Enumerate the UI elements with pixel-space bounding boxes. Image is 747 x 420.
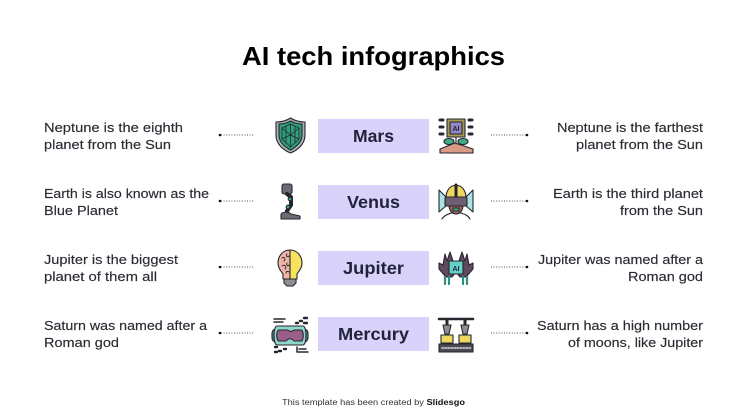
icon: VR headset person xyxy=(439,185,473,219)
right text: Saturn: Saturn has a high number xyxy=(537,318,704,333)
row 4: Mercury xyxy=(44,317,704,352)
right connector xyxy=(491,266,528,268)
icon: hands holding AI chip xyxy=(439,252,473,284)
row 3: Jupiter xyxy=(44,250,704,286)
right text: Earth: from the Sun xyxy=(620,203,703,218)
left text: Earth: Earth is also known as the xyxy=(44,186,209,201)
left text: Jupiter xyxy=(44,252,178,284)
right text: Earth xyxy=(553,186,703,218)
icon: VR goggles xyxy=(272,318,308,352)
icon: AI chip plant: AI xyxy=(452,126,460,133)
icon: robot arm xyxy=(281,184,300,219)
right text: Saturn: of moons, like Jupiter xyxy=(568,335,704,350)
label box: Mercury xyxy=(318,317,429,351)
left text: Saturn xyxy=(44,318,208,350)
label box: Venus: Venus xyxy=(347,192,400,212)
left connector xyxy=(219,332,254,334)
right text: Neptune: Neptune is the farthest xyxy=(557,120,703,135)
icon: AI chip plant xyxy=(440,119,473,153)
icon: factory conveyor robots xyxy=(439,319,473,352)
left text: Neptune: planet from the Sun xyxy=(44,137,171,152)
left text: Saturn: Roman god xyxy=(44,335,119,350)
right connector xyxy=(491,332,528,334)
left text: Earth xyxy=(44,186,209,218)
right text: Neptune xyxy=(557,120,703,152)
footer credit: This template has been created by Slidesgo xyxy=(282,398,465,407)
left text: Jupiter: Jupiter is the biggest xyxy=(44,252,178,267)
right text: Jupiter xyxy=(538,252,704,284)
row 2: Venus xyxy=(44,184,703,219)
left connector xyxy=(219,266,254,268)
icon: brain light bulb xyxy=(278,250,302,286)
label box: Jupiter xyxy=(318,251,429,285)
right text: Saturn xyxy=(537,318,704,350)
label box: Mars xyxy=(318,119,429,153)
label box: Jupiter: Jupiter xyxy=(343,258,404,278)
left connector xyxy=(219,134,254,136)
right text: Neptune: planet from the Sun xyxy=(576,137,703,152)
right text: Jupiter: Jupiter was named after a xyxy=(538,252,704,267)
left text: Saturn: Saturn was named after a xyxy=(44,318,208,333)
right connector xyxy=(491,134,528,136)
row 1: Mars xyxy=(44,118,703,153)
icon: hands holding AI chip: AI xyxy=(452,266,460,273)
right text: Jupiter: Roman god xyxy=(628,269,703,284)
left text: Neptune xyxy=(44,120,183,152)
left text: Earth: Blue Planet xyxy=(44,203,118,218)
label box: Venus xyxy=(318,185,429,219)
title: AI tech infographics xyxy=(242,41,505,71)
icon: shield network xyxy=(276,118,305,153)
label box: Mercury: Mercury xyxy=(338,324,409,344)
right connector xyxy=(491,200,528,202)
label box: Mars: Mars xyxy=(353,126,394,146)
left text: Neptune: Neptune is the eighth xyxy=(44,120,183,135)
left text: Jupiter: planet of them all xyxy=(44,269,157,284)
left connector xyxy=(219,200,254,202)
right text: Earth: Earth is the third planet xyxy=(553,186,703,201)
